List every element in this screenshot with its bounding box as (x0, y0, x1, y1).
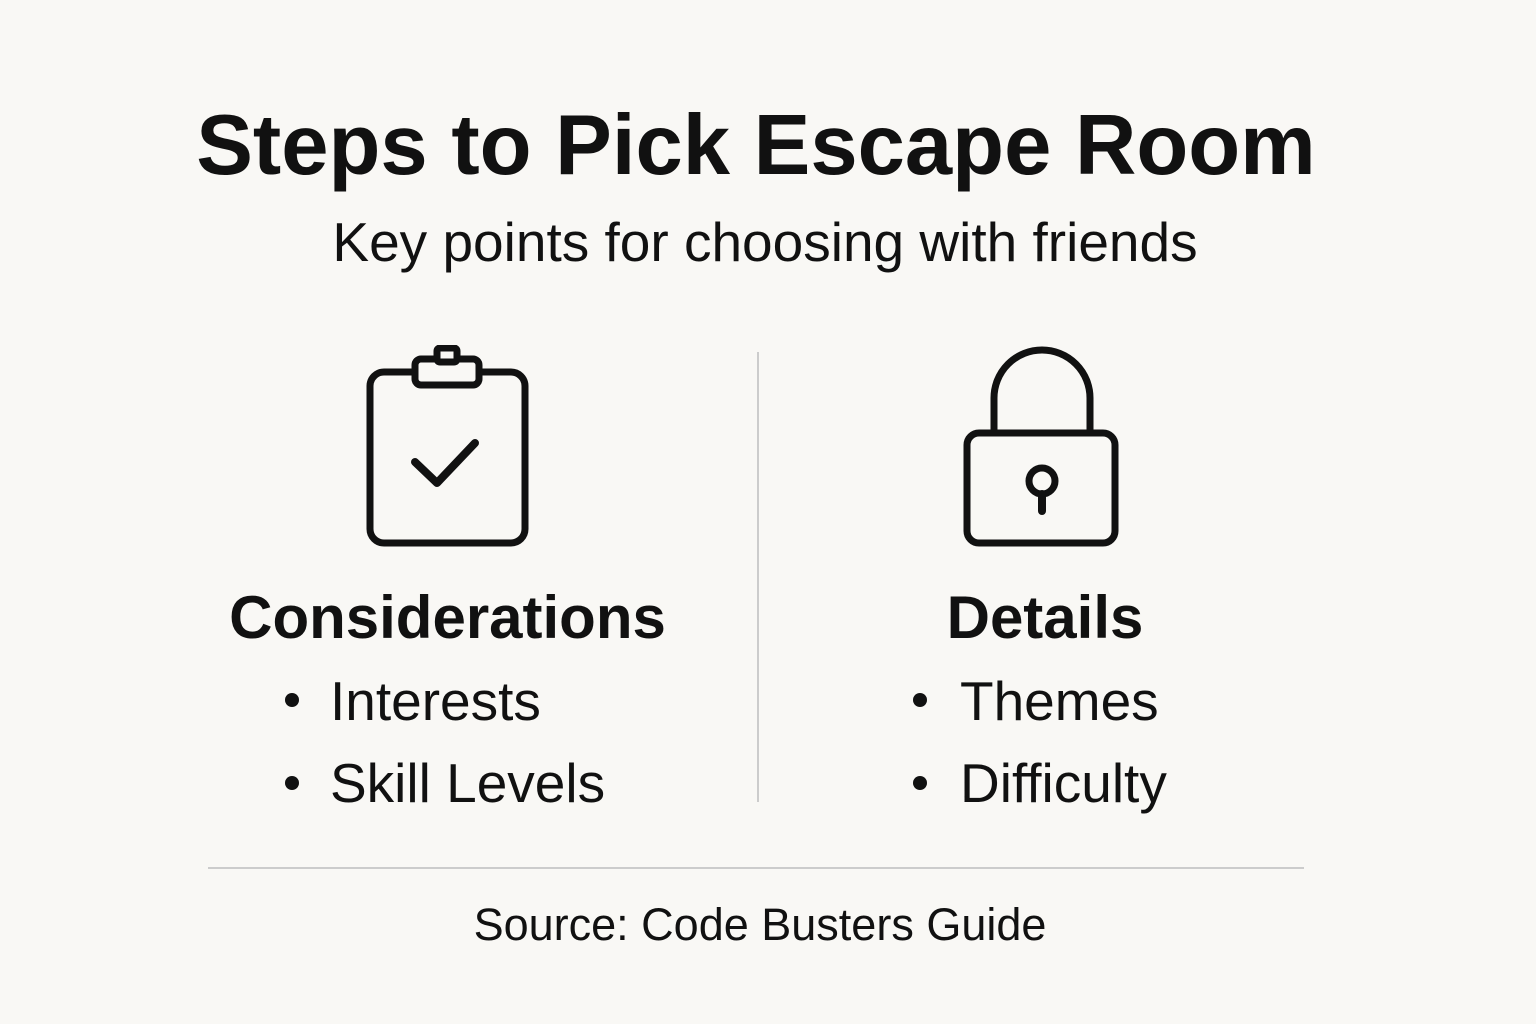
source: Source: Code Busters Guide (474, 899, 1046, 950)
icon: padlock (964, 346, 1118, 546)
rule (208, 867, 1304, 869)
heading: Considerations: Considerations (229, 584, 666, 651)
list: Themes (960, 670, 1159, 732)
divider (757, 352, 759, 802)
heading: Details: Details (947, 584, 1143, 651)
list: Difficulty (960, 752, 1167, 814)
icon: clipboard (366, 345, 528, 546)
panel: considerations (229, 345, 666, 814)
list (285, 670, 605, 814)
list (913, 670, 1167, 814)
subtitle: Key points for choosing with friends (332, 211, 1198, 273)
panel: details (913, 346, 1167, 814)
list: Skill Levels (330, 752, 605, 814)
list: Interests (330, 670, 541, 732)
title: Steps to Pick Escape Room (196, 98, 1316, 193)
